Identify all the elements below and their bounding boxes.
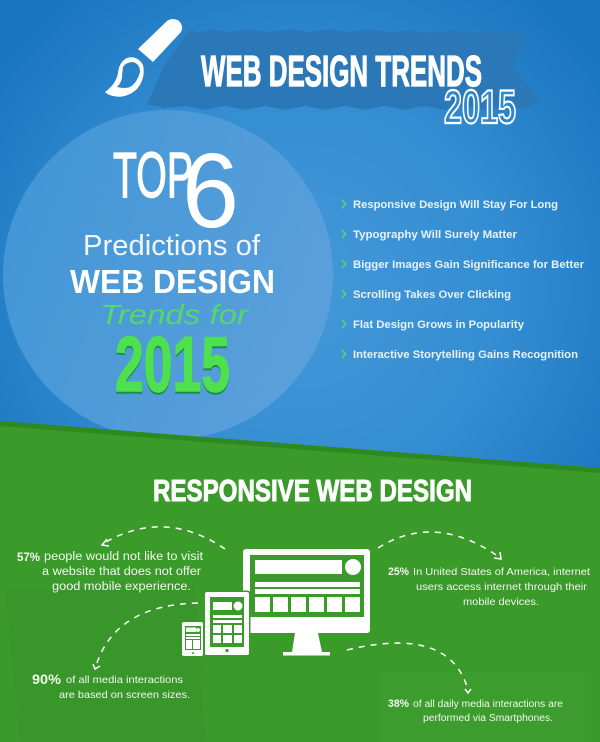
heading: numeral 6: 6 [182, 132, 239, 250]
circle background [3, 110, 333, 440]
stat: 25%: In United States of America, internet [413, 566, 590, 578]
stat: 90%: 90% [32, 671, 62, 687]
list: six predictions [342, 199, 585, 361]
stat: 57%: a website that does not offer [42, 566, 201, 578]
stat: 38%: of all daily media interactions are [413, 699, 563, 710]
heading: 2015 shadow and text [115, 320, 230, 410]
icon: smartphone [182, 622, 203, 656]
list item 5: Flat Design Grows in Popularity [353, 319, 525, 331]
stat: 25%: 25% [388, 566, 409, 578]
stat: 38%: 38% [388, 698, 409, 710]
stat: 25% [388, 566, 590, 608]
icon: tablet [204, 590, 250, 656]
list item 1: Responsive Design Will Stay For Long [353, 199, 558, 211]
list item 2: Typography Will Surely Matter [353, 229, 518, 241]
list item 4: Scrolling Takes Over Clicking [353, 289, 511, 301]
arrow: desktop to 57% stat [102, 527, 225, 549]
stat: 90% [32, 671, 190, 701]
stat: 57%: people would not like to visit [44, 551, 204, 563]
stat: 57%: good mobile experience. [52, 581, 191, 593]
list item 3: Bigger Images Gain Significance for Better [353, 259, 585, 271]
icon: paint brush [105, 19, 182, 97]
stat: 57%: 57% [17, 550, 40, 564]
heading: 2015 shadow and text: 2015 [115, 322, 230, 410]
stat: 38% [388, 698, 563, 724]
panel: top 6 circle [3, 110, 333, 440]
section heading: RESPONSIVE WEB DESIGN [153, 473, 472, 508]
list item 6: Interactive Storytelling Gains Recognition [353, 349, 578, 361]
heading: top: TOP [113, 139, 193, 211]
arrow: desktop to 38% stat [347, 643, 471, 693]
stat: 57% [17, 550, 204, 593]
heading: 2015 shadow and text: 2015 [115, 320, 230, 408]
header banner [105, 19, 541, 133]
stat: 38%: performed via Smartphones. [423, 713, 553, 724]
stat: 25%: mobile devices. [463, 596, 539, 608]
stat: 90%: of all media interactions [66, 674, 183, 686]
stat: 90%: are based on screen sizes. [59, 689, 190, 701]
arrow: desktop to 25% stat [378, 532, 501, 559]
title year: 2015 outlined: 2015 [444, 80, 516, 133]
heading: trends for: Trends for [100, 299, 250, 330]
blue background [0, 0, 600, 480]
heading: web design: WEB DESIGN [70, 263, 275, 300]
heading: predictions of: Predictions of [83, 230, 261, 262]
green section background [0, 421, 600, 742]
icon: desktop monitor [243, 549, 370, 656]
arrow: tablet to 90% stat [93, 603, 198, 669]
stat: 25%: users access internet through their [416, 581, 588, 593]
banner ribbon [147, 29, 541, 110]
panel: responsive web design [0, 421, 600, 742]
